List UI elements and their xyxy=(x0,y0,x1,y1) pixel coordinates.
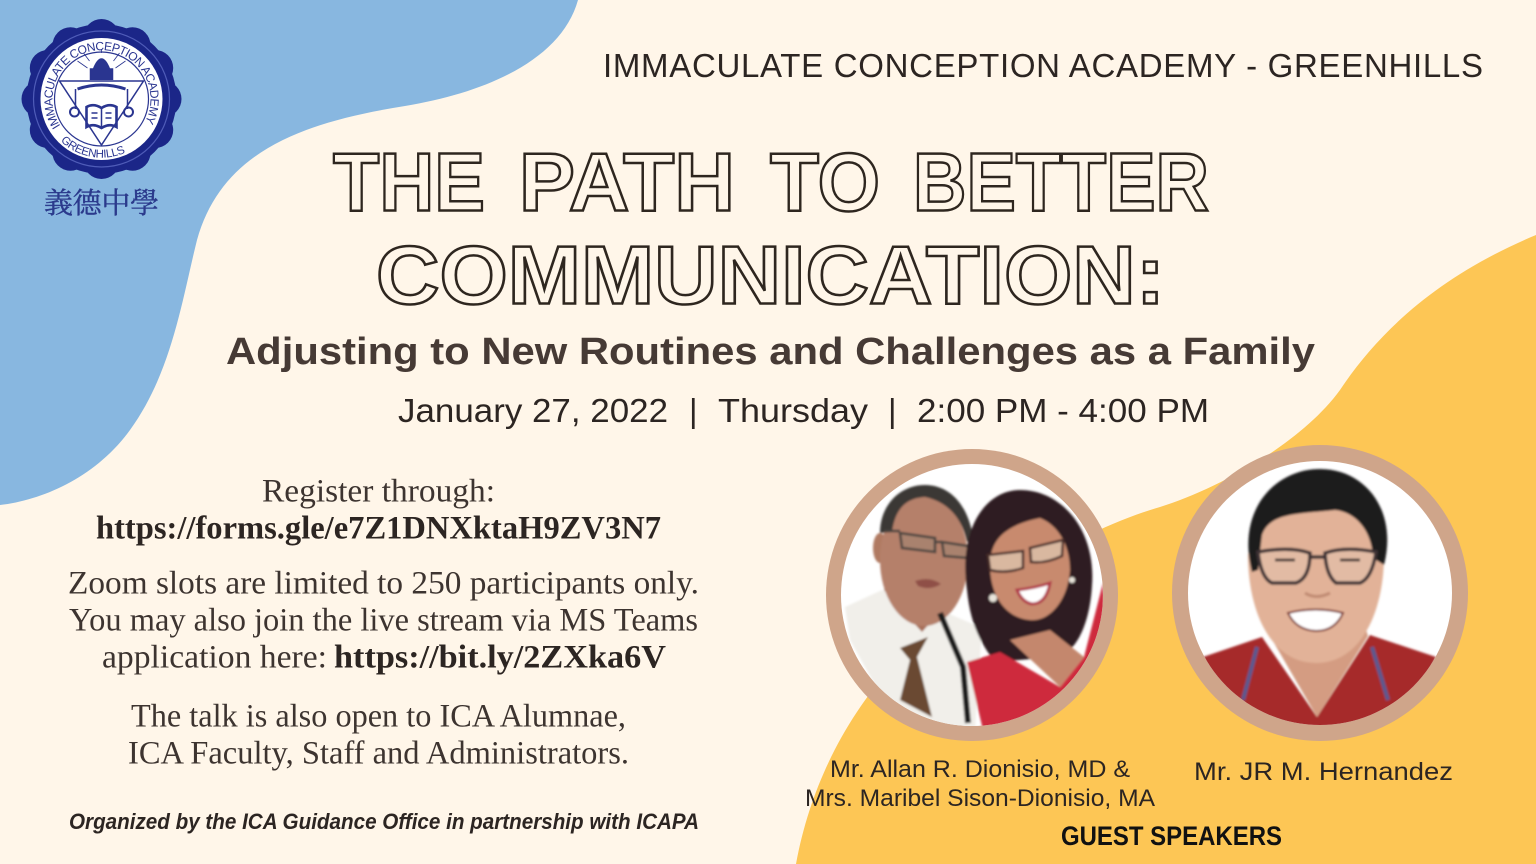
logo chinese name: 義德中學 xyxy=(44,181,159,222)
school name: IMMACULATE CONCEPTION ACADEMY - GREENHILLS xyxy=(603,47,1483,84)
date and time: January 27, 2022 xyxy=(398,392,668,429)
registration text: Register through: xyxy=(262,474,495,510)
face xyxy=(1248,510,1384,663)
title: PATH xyxy=(519,136,735,228)
audience note: ICA Faculty, Staff and Administrators. xyxy=(128,736,629,772)
guest speakers label: GUEST SPEAKERS xyxy=(1061,821,1282,851)
seal xyxy=(22,19,182,179)
speaker names: Dionisio: Mrs. Maribel Sison-Dionisio, MA xyxy=(805,785,1155,812)
title xyxy=(333,136,1209,322)
woman xyxy=(965,490,1110,730)
yellow blob xyxy=(796,235,1536,864)
zoom info text: You may also join the live stream via MS Teams xyxy=(69,602,698,638)
zoom info text xyxy=(68,566,699,676)
title: THE xyxy=(333,136,485,228)
organizer credit: Organized by the ICA Guidance Office in partnership with ICAPA xyxy=(69,809,699,834)
audience note xyxy=(128,698,629,772)
date and time: Thursday xyxy=(718,392,869,429)
blue blob xyxy=(0,0,578,505)
registration text xyxy=(96,474,661,546)
eyes xyxy=(1275,558,1360,562)
speaker name: Hernandez: Mr. JR M. Hernandez xyxy=(1194,758,1453,786)
seal text: GREENHILLS xyxy=(62,136,124,158)
audience note: The talk is also open to ICA Alumnae, xyxy=(131,698,626,734)
zoom info text: Zoom slots are limited to 250 participants only. xyxy=(68,566,699,602)
hair xyxy=(1248,469,1387,572)
neck xyxy=(1274,630,1369,717)
school logo xyxy=(22,19,182,179)
title: COMMUNICATION: xyxy=(376,228,1165,322)
date and time: | xyxy=(888,392,897,429)
speaker names: Dionisio xyxy=(805,756,1155,812)
seal text: IMMACULATE CONCEPTION ACADEMY xyxy=(44,42,159,130)
shirt xyxy=(1204,634,1436,725)
glasses xyxy=(1258,549,1376,583)
speaker names: Dionisio: Mr. Allan R. Dionisio, MD & xyxy=(830,756,1130,783)
smile xyxy=(1288,610,1343,631)
title: BETTER xyxy=(913,136,1209,228)
registration text: https://forms.gle/e7Z1DNXktaH9ZV3N7 xyxy=(96,510,661,546)
man xyxy=(845,485,982,730)
subtitle: Adjusting to New Routines and Challenges as a Family xyxy=(226,331,1315,373)
date and time: | xyxy=(689,392,698,429)
nose xyxy=(1305,593,1330,596)
speaker photo: Hernandez xyxy=(1172,445,1468,741)
date and time: 2:00 PM - 4:00 PM xyxy=(917,392,1209,429)
title: TO xyxy=(770,136,880,228)
seal emblem xyxy=(60,49,144,145)
zoom info text: application here: xyxy=(102,640,327,676)
speaker photo: Dionisio couple xyxy=(826,449,1118,741)
zoom info text: https://bit.ly/2ZXka6V xyxy=(334,640,666,676)
date and time xyxy=(398,392,1209,429)
